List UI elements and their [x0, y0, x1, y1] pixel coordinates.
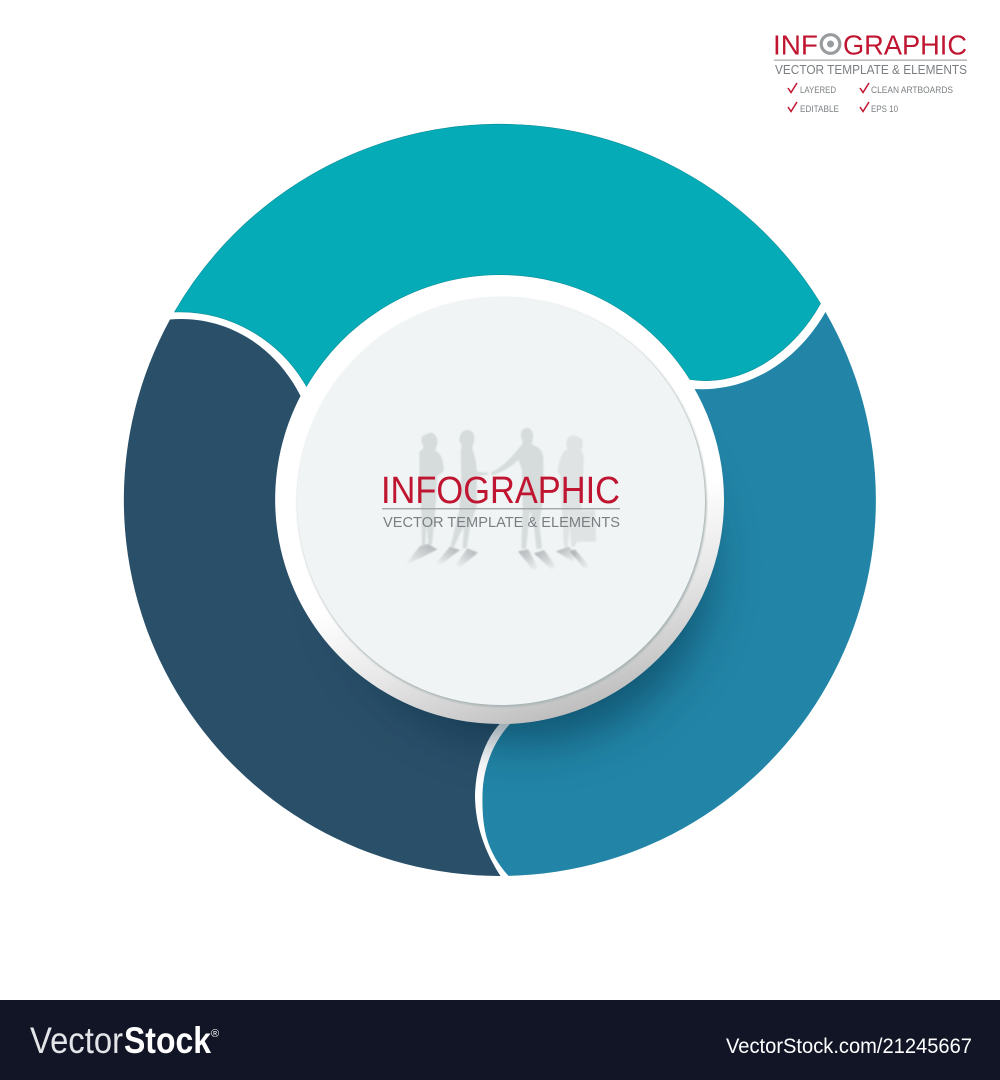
footer bar: [0, 1000, 1000, 1080]
centre title: [381, 470, 620, 531]
logo rule: [774, 60, 967, 61]
segment: left dark navy: [124, 319, 500, 876]
logo word start: INF: [773, 30, 818, 60]
icon: target letter O: [821, 35, 840, 53]
feature: layered: LAYERED: [800, 85, 836, 95]
logo word end: GRAPHIC: [843, 30, 967, 60]
silhouettes of business people: [405, 428, 596, 570]
feature: layered: [788, 83, 836, 95]
centre subheading: VECTOR TEMPLATE & ELEMENTS: [383, 514, 620, 531]
footer registered mark: ®: [211, 1028, 219, 1040]
footer url: VectorStock.com/21245667: [726, 1035, 972, 1058]
person: man: [491, 428, 543, 549]
feature: eps 10: EPS 10: [871, 104, 898, 114]
feature: editable: [788, 102, 839, 114]
top-right logo block: [773, 30, 967, 114]
segment: right blue: [482, 312, 876, 876]
disc edge shadow: [298, 298, 706, 707]
person: woman left: [419, 433, 444, 545]
centre heading: INFOGRAPHIC: [381, 470, 620, 512]
feature: clean artboards: CLEAN ARTBOARDS: [871, 85, 953, 95]
donut chart: three interlocking segments: [124, 124, 876, 876]
person: woman centre-left: [451, 430, 488, 548]
footer logo bold part: Stock: [124, 1020, 211, 1061]
feature: editable: EDITABLE: [800, 104, 839, 114]
person: woman right: [558, 435, 596, 547]
feature: clean artboards: [860, 83, 953, 95]
logo subheading: VECTOR TEMPLATE & ELEMENTS: [775, 62, 967, 77]
centre rule: [382, 508, 620, 509]
foot shadows: [405, 544, 437, 565]
footer logo light part: Vector: [30, 1020, 123, 1061]
centre disc: [276, 276, 724, 724]
segment: top teal: [174, 124, 820, 386]
disc face: [297, 297, 705, 705]
drop shadow of centre disc: [321, 510, 732, 772]
feature: eps 10: [860, 102, 898, 114]
disc rim: [276, 276, 724, 724]
